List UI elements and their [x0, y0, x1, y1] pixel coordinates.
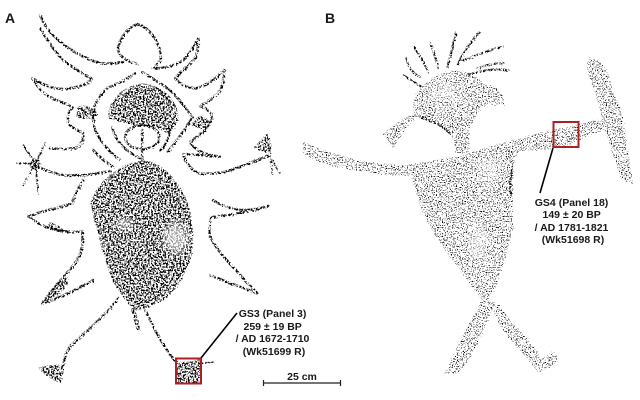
figure B staff [586, 56, 632, 183]
label GS4: / AD 1781-1821 [535, 222, 609, 234]
red sample box GS3 [176, 358, 201, 384]
leader line GS4 [540, 148, 553, 193]
label GS3: / AD 1672-1710 [236, 333, 310, 345]
label GS3: GS3 (Panel 3) [239, 308, 306, 320]
figure A body light patches [115, 218, 189, 253]
leader line GS3 [201, 313, 237, 358]
label GS4: (Wk51698 R) [542, 234, 604, 246]
figure A: rock art anthropomorph [17, 15, 279, 384]
figure B light patches [433, 82, 499, 260]
figure B stippled body [302, 56, 632, 373]
scale bar [264, 371, 340, 386]
figure A torso [90, 160, 192, 310]
figure B right leg [488, 300, 557, 371]
figure B: rock art figure with crest [302, 32, 632, 373]
panel label B: B [325, 10, 335, 26]
label GS4: 149 ± 20 BP [542, 209, 601, 221]
figure A outlines: head loop and limbs [17, 15, 279, 365]
label GS4: GS4 (Panel 18) [535, 197, 608, 209]
figure B feathers [403, 32, 512, 195]
label GS3: (Wk51699 R) [243, 346, 305, 358]
figure B arms [302, 118, 606, 175]
scale bar: 25 cm [287, 371, 317, 383]
label GS3: 259 ± 19 BP [243, 321, 302, 333]
face upper half [108, 83, 178, 133]
red sample box GS4 [554, 122, 578, 147]
figure B torso [405, 138, 520, 302]
panel label A: A [5, 10, 15, 26]
figure B head [382, 70, 503, 152]
figure A solid details [29, 83, 271, 384]
figure B left leg [443, 298, 492, 373]
